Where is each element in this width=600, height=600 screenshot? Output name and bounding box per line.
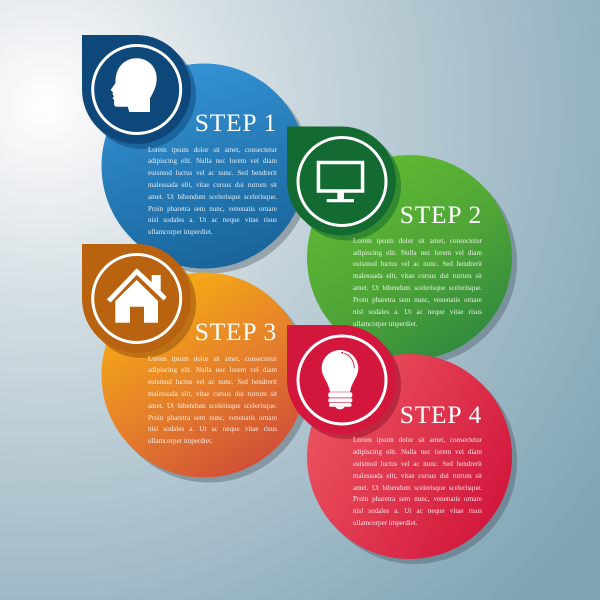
heading: step 1: STEP 1: [195, 108, 277, 137]
text: step 3: adipiscing elit. Nulla nec lorem vel diam: [148, 366, 277, 374]
text: step 2: Proin pharetra sem nunc, venenatis ornare: [353, 296, 482, 304]
text: step 4: adipiscing elit. Nulla nec lorem vel diam: [353, 448, 482, 456]
text: step 2: nisl sodales a. Ut ac neque vitae risus: [353, 308, 482, 316]
text: step 1: nisl sodales a. Ut ac neque vitae risus: [148, 216, 277, 224]
text: step 2: amet. Ut bibendum scelerisque scelerisque.: [353, 284, 482, 292]
text: step 1: adipiscing elit. Nulla nec lorem vel diam: [148, 157, 277, 165]
text: step 3: euismod luctus vel ac nunc. Sed hendrerit: [148, 378, 277, 386]
text: step 3: ullamcorper imperdiet.: [148, 437, 213, 445]
text: step 4: Proin pharetra sem nunc, venenatis ornare: [353, 495, 482, 503]
heading: step 4: STEP 4: [400, 400, 482, 428]
text: step 2: [353, 237, 482, 328]
heading: step 3: STEP 3: [195, 317, 277, 346]
text: step 3: amet. Ut bibendum scelerisque scelerisque.: [148, 402, 277, 410]
text: step 4: [353, 436, 482, 527]
text: step 3: Lorem ipsum dolor sit amet, consectetur: [148, 354, 277, 362]
text: step 3: malesuada elit, vitae cursus dui rutrum sit: [148, 390, 277, 398]
text: step 1: Proin pharetra sem nunc, venenatis ornare: [148, 205, 277, 213]
text: step 4: nisl sodales a. Ut ac neque vitae risus: [353, 507, 482, 515]
heading: step 2: STEP 2: [400, 200, 482, 228]
text: step 1: [148, 146, 277, 236]
panel: step 2: [287, 126, 517, 360]
text: step 1: amet. Ut bibendum scelerisque scelerisque.: [148, 193, 277, 201]
text: step 2: adipiscing elit. Nulla nec lorem vel diam: [353, 249, 482, 257]
text: step 4: ullamcorper imperdiet.: [353, 519, 418, 527]
text: step 4: euismod luctus vel ac nunc. Sed hendrerit: [353, 460, 482, 468]
text: step 4: malesuada elit, vitae cursus dui rutrum sit: [353, 472, 482, 480]
text: step 1: euismod luctus vel ac nunc. Sed hendrerit: [148, 169, 277, 177]
text: step 4: Lorem ipsum dolor sit amet, consectetur: [353, 436, 482, 444]
text: step 4: amet. Ut bibendum scelerisque scelerisque.: [353, 484, 482, 492]
text: step 3: nisl sodales a. Ut ac neque vitae risus: [148, 425, 277, 433]
text: step 3: Proin pharetra sem nunc, venenatis ornare: [148, 414, 277, 422]
text: step 2: malesuada elit, vitae cursus dui rutrum sit: [353, 272, 482, 280]
text: step 1: ullamcorper imperdiet.: [148, 228, 213, 236]
text: step 1: Lorem ipsum dolor sit amet, consectetur: [148, 146, 277, 154]
text: step 2: Lorem ipsum dolor sit amet, consectetur: [353, 237, 482, 245]
text: step 2: ullamcorper imperdiet.: [353, 320, 418, 328]
text: step 1: malesuada elit, vitae cursus dui rutrum sit: [148, 181, 277, 189]
text: step 2: euismod luctus vel ac nunc. Sed hendrerit: [353, 260, 482, 268]
panel: step 3: [82, 244, 304, 482]
panel: step 1: [82, 35, 302, 274]
text: step 3: [148, 354, 277, 445]
